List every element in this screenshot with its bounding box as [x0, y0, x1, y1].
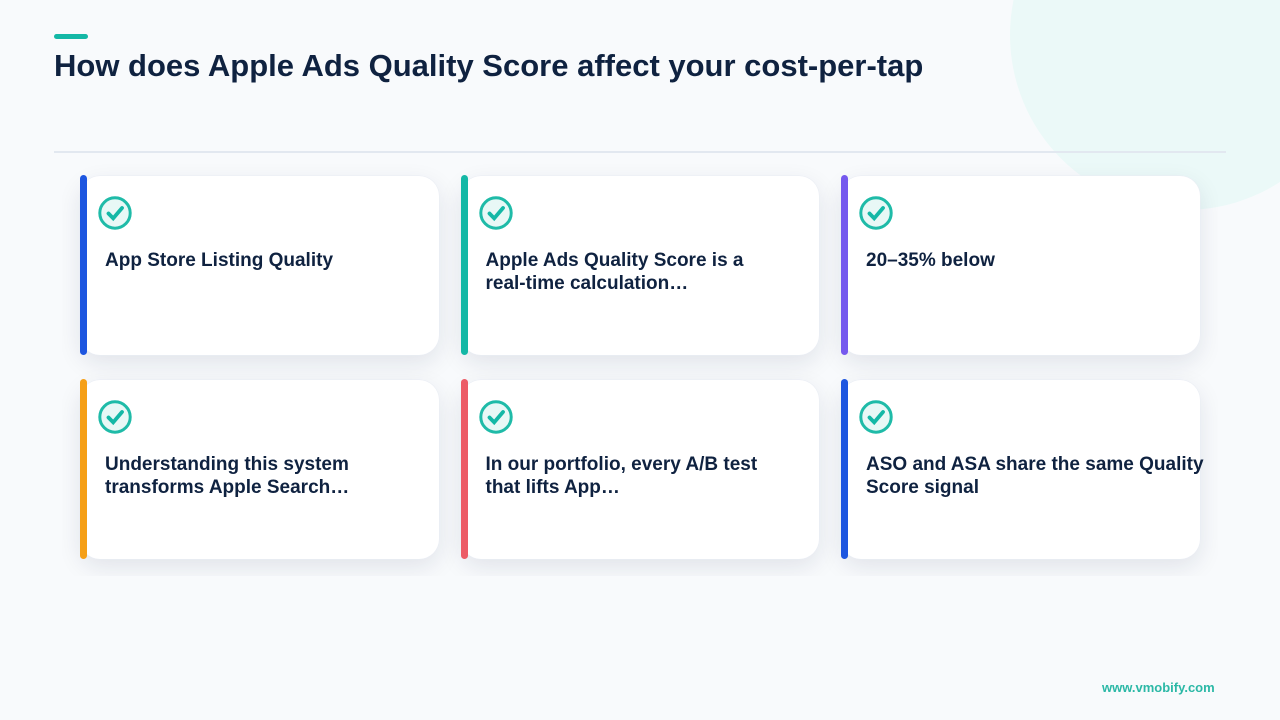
- card 4 text: [105, 454, 349, 498]
- header divider: [54, 151, 1226, 153]
- icon: check card 4: [98, 400, 132, 434]
- panel: card 3: [841, 176, 1200, 354]
- card 3 accent: [841, 175, 848, 355]
- title: How does Apple Ads Quality Score affect your cost-per-tap: [54, 48, 923, 83]
- icon: check card 1: [98, 196, 132, 230]
- card 5 text: In our portfolio, every A/B test: [486, 454, 757, 475]
- card 4 accent: [80, 379, 87, 559]
- footer url: www.vmobify.com: [1102, 680, 1215, 695]
- card 6 text: Score signal: [866, 477, 979, 498]
- icon: check card 3: [859, 196, 893, 230]
- card 1 accent: [80, 175, 87, 355]
- icon: check card 2: [479, 196, 513, 230]
- card 5 accent: [460, 379, 468, 559]
- card 1 text: App Store Listing Quality: [105, 250, 333, 271]
- panel: card 2: [460, 176, 819, 354]
- card 6 text: ASO and ASA share the same Quality: [866, 454, 1204, 475]
- card 3 text: 20–35% below: [866, 250, 995, 271]
- card 5 text: that lifts App…: [486, 477, 620, 498]
- panel: card 6: [841, 380, 1200, 558]
- card 4 text: transforms Apple Search…: [105, 477, 349, 498]
- panel: card 5: [460, 380, 819, 558]
- card 2 text: real-time calculation…: [486, 273, 688, 294]
- panel: card 1: [80, 176, 438, 354]
- card 4 text: Understanding this system: [105, 454, 349, 475]
- decorative circle top right: [1010, 0, 1280, 210]
- icon: check card 6: [859, 400, 893, 434]
- card grid: [75, 175, 1205, 572]
- card 5 text: [486, 454, 757, 498]
- card 6 text: [866, 454, 1204, 498]
- title accent bar: [54, 34, 88, 39]
- card 6 accent: [841, 379, 848, 559]
- icon: check card 5: [479, 400, 513, 434]
- card 2 text: Apple Ads Quality Score is a: [486, 250, 743, 271]
- card 2 accent: [460, 175, 468, 355]
- panel: card 4: [80, 380, 438, 558]
- card 2 text: [486, 250, 744, 294]
